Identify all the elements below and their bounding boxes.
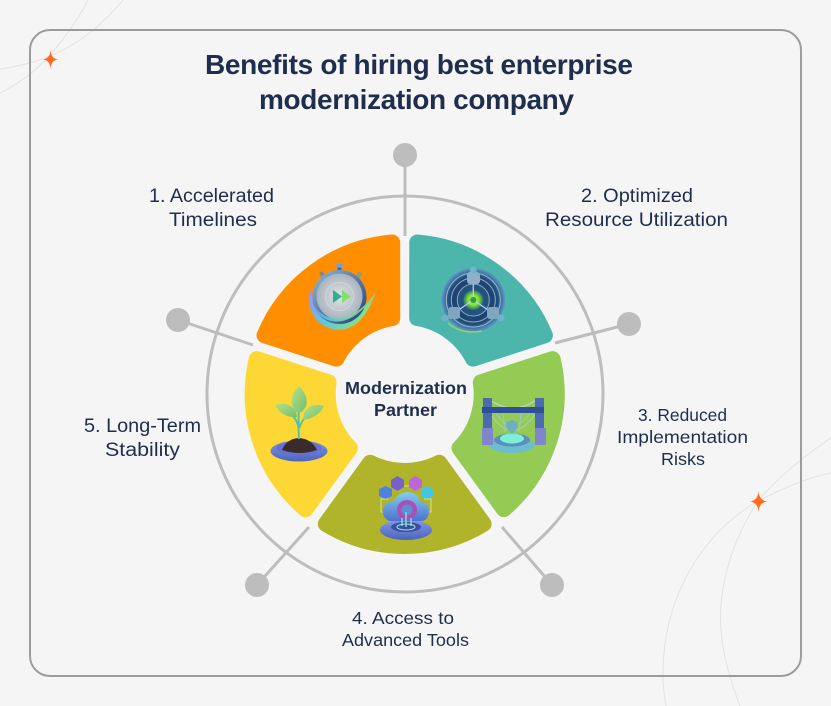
label 4: 4. Access to — [352, 608, 454, 628]
segment 2: teal — [381, 225, 558, 385]
label 3: Implementation — [617, 427, 748, 447]
label 3: 3. Reduced — [638, 405, 727, 425]
label 3 — [617, 405, 748, 469]
label 4: Advanced Tools — [342, 630, 469, 650]
connector: bottom left — [245, 527, 309, 597]
icon: plant — [270, 386, 328, 462]
label 3: Risks — [661, 449, 705, 469]
label 2: 2. Optimized — [581, 186, 693, 207]
title — [205, 49, 633, 115]
segment 4: olive — [326, 463, 484, 546]
connector: right — [555, 312, 641, 343]
connector: top — [393, 143, 417, 236]
outer ring — [207, 196, 603, 592]
title: Benefits of hiring best enterprise — [205, 49, 633, 80]
connector: left — [166, 308, 253, 345]
label 2: Resource Utilization — [545, 210, 728, 231]
title: modernization company — [259, 84, 574, 115]
label 2 — [545, 186, 728, 231]
label 5 — [84, 416, 201, 461]
label 1: 1. Accelerated — [149, 186, 274, 207]
icon: orange sparkle bottom right — [750, 491, 767, 512]
center label: Modernization — [345, 378, 467, 398]
icon: stopwatch — [309, 264, 376, 330]
segment 5: yellow — [236, 340, 364, 516]
icon: cloud with cubes — [379, 476, 433, 540]
segment 1: orange — [252, 225, 428, 385]
label 1 — [149, 186, 274, 231]
label 4 — [342, 608, 469, 650]
icon: bridge — [482, 398, 546, 453]
label 5: 5. Long-Term — [84, 416, 201, 437]
label 5: Stability — [105, 440, 181, 461]
segment 3: green — [446, 340, 574, 516]
center label: Partner — [374, 400, 437, 420]
center label — [345, 378, 467, 420]
label 1: Timelines — [169, 210, 257, 231]
connector: bottom right — [502, 527, 564, 597]
icon: orange sparkle top left — [43, 50, 58, 69]
icon: orbit hub — [441, 266, 505, 332]
